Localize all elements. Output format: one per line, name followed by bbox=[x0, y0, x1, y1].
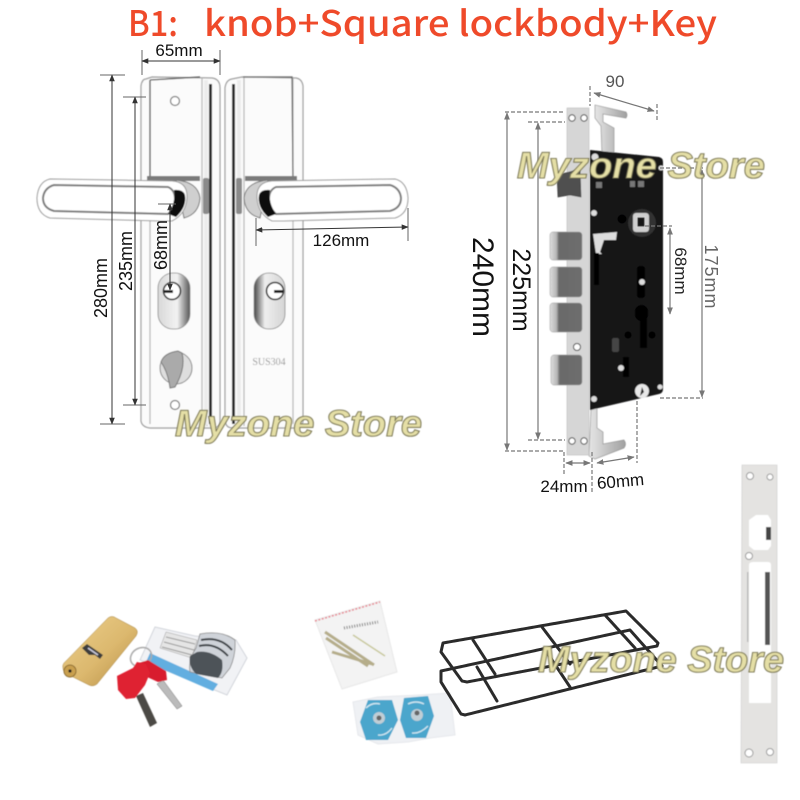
watermark: Myzone Store: Myzone Store bbox=[175, 403, 422, 444]
dimension: 126mm bbox=[256, 208, 408, 250]
dimension: 280mm: 280mm bbox=[91, 258, 111, 318]
upper gasket bbox=[441, 611, 658, 682]
right handle bbox=[236, 176, 408, 221]
lock body dimensions bbox=[466, 72, 721, 496]
dimension: 240mm bbox=[466, 112, 565, 451]
dimension: 90: 90 bbox=[606, 72, 624, 91]
lock cylinder bbox=[63, 616, 137, 686]
mortise lock body bbox=[550, 105, 664, 459]
lower gasket bbox=[441, 630, 662, 715]
keys in blister pack bbox=[117, 627, 247, 727]
black case bbox=[590, 150, 664, 410]
dimension: 126mm: 126mm bbox=[313, 231, 369, 250]
watermark: Myzone Store: Myzone Store bbox=[538, 639, 784, 680]
right plate bbox=[225, 77, 303, 428]
bag of blue parts bbox=[353, 693, 455, 744]
rubber gaskets bbox=[441, 611, 662, 715]
dimension: 68mm: 68mm bbox=[151, 220, 171, 270]
dimension: 60mm bbox=[596, 401, 645, 493]
dimension: 175mm bbox=[660, 168, 721, 398]
dimension: 235mm: 235mm bbox=[116, 231, 136, 291]
dimension: 24mm bbox=[540, 452, 592, 496]
dimension: 24mm: 24mm bbox=[540, 477, 588, 496]
dimension: 65mm: 65mm bbox=[155, 41, 203, 60]
right plate: SUS304 bbox=[252, 357, 286, 368]
dimension: 240mm: 240mm bbox=[466, 237, 499, 337]
left handle bbox=[37, 176, 209, 221]
dimension: 65mm bbox=[142, 41, 220, 75]
dimension: 225mm bbox=[507, 122, 565, 440]
dimension: 90 bbox=[590, 72, 657, 122]
red key bbox=[117, 662, 157, 727]
right keyhole escutcheon bbox=[254, 273, 285, 329]
strike plate bbox=[741, 465, 777, 763]
handle dimensions bbox=[91, 41, 408, 424]
dimension: 280mm bbox=[91, 75, 125, 424]
top hook bbox=[595, 105, 627, 156]
bottom hook bbox=[589, 408, 626, 459]
watermark: Myzone Store: Myzone Store bbox=[517, 145, 765, 186]
dimension: 235mm bbox=[116, 97, 146, 405]
thumb turn bbox=[160, 351, 192, 388]
key ring bbox=[127, 644, 155, 670]
left plate bbox=[141, 77, 220, 428]
deadbolts bbox=[550, 232, 582, 385]
dimension: 175mm: 175mm bbox=[701, 244, 721, 310]
blister pack bbox=[140, 627, 247, 695]
dimension: 68mm: 68mm bbox=[671, 247, 690, 295]
faceplate bbox=[567, 108, 589, 455]
silver key bbox=[136, 660, 182, 709]
screw bag bbox=[315, 601, 397, 689]
dimension: 68mm bbox=[645, 226, 690, 314]
dimension: 68mm bbox=[151, 204, 176, 290]
left keyhole escutcheon bbox=[158, 273, 190, 329]
dimension: 225mm: 225mm bbox=[507, 248, 535, 332]
dimension: 60mm: 60mm bbox=[596, 470, 645, 493]
latch bolt bbox=[557, 169, 581, 197]
door handle set bbox=[37, 77, 408, 428]
